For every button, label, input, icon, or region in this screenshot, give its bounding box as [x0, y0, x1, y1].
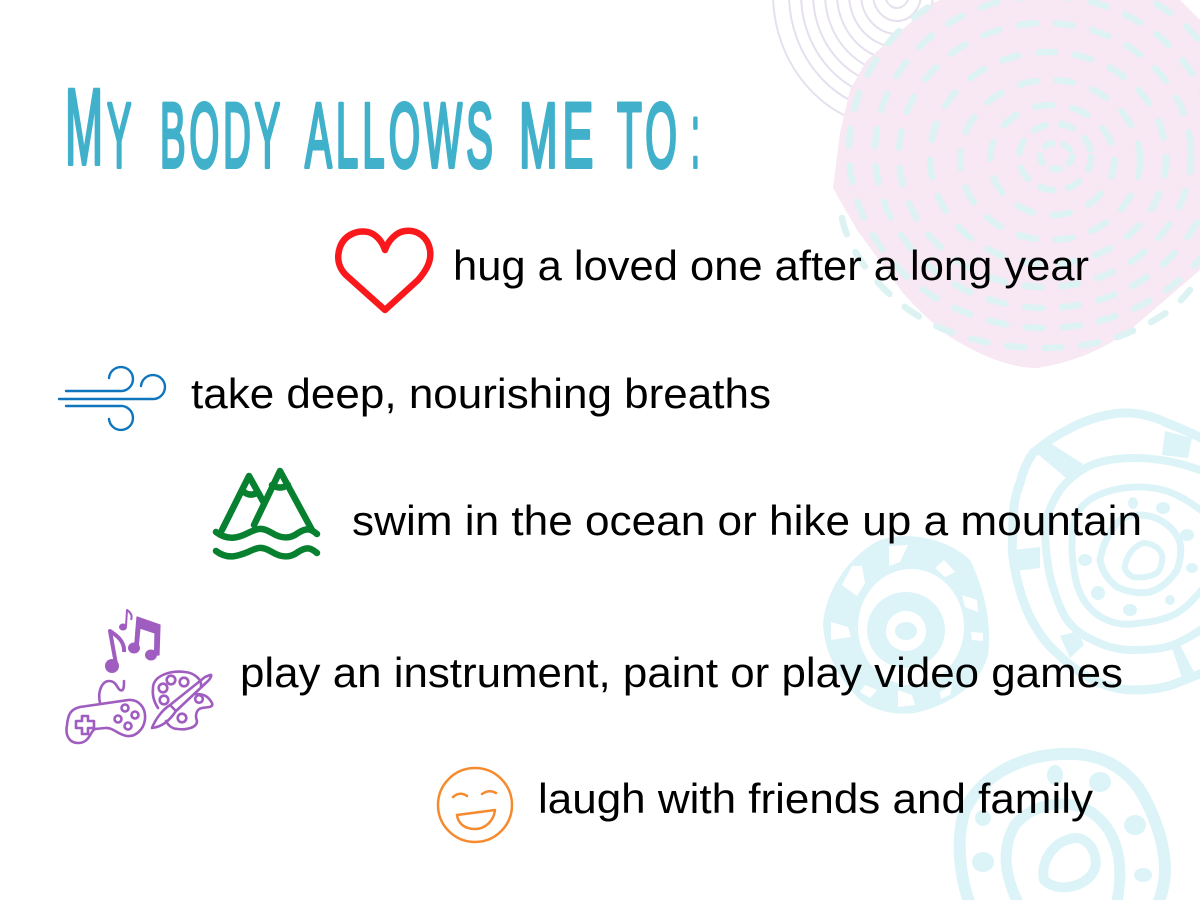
title: BODY [160, 85, 284, 187]
background: small left tribal circle [823, 536, 989, 714]
game controller [66, 681, 145, 743]
background: large right tribal circle [1012, 413, 1200, 690]
paint palette [152, 672, 212, 729]
infographic canvas: : [691, 85, 703, 187]
title: Y [107, 85, 135, 187]
icon: heart [338, 231, 430, 310]
title: M [65, 66, 107, 187]
icon: music, controller and palette [66, 610, 212, 743]
title: ALLOWS [305, 85, 497, 187]
title: ME [519, 85, 598, 187]
music notes [105, 610, 160, 673]
background: pink blob [833, 0, 1200, 368]
icon: laughing face [438, 768, 512, 842]
background: dashed concentric rings [842, 0, 1200, 348]
text: swim: swim in the ocean or hike up a mountain [352, 497, 1142, 544]
background: bottom tribal circle [960, 754, 1165, 900]
text: breaths: take deep, nourishing breaths [191, 370, 771, 417]
icon: mountains and waves [216, 471, 317, 556]
text: hug: hug a loved one after a long year [453, 242, 1089, 289]
icon: wind [59, 367, 165, 430]
background: fingerprint rings [773, 0, 1021, 128]
text: laugh: laugh with friends and family [538, 775, 1093, 822]
text: play: play an instrument, paint or play video games [240, 649, 1123, 696]
title [65, 66, 703, 187]
title: TO [617, 85, 681, 187]
